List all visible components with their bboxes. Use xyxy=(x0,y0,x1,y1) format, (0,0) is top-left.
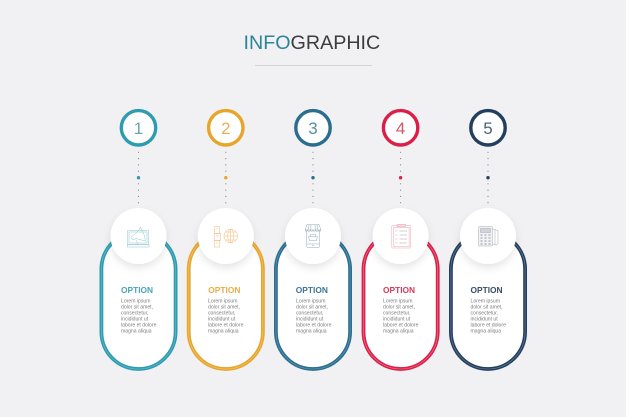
title: INFOGRAPHIC xyxy=(244,32,380,54)
body text 1: consectetur, xyxy=(121,311,148,317)
body text 1: Lorem ipsum xyxy=(121,299,150,305)
body text 5: consectetur, xyxy=(470,311,498,317)
icon: calculator terminal xyxy=(478,226,498,246)
body text 2: incididunt ut xyxy=(208,317,236,323)
number badge 2 xyxy=(209,111,243,145)
option heading 3: OPTION xyxy=(296,285,328,295)
connector 5 xyxy=(486,152,490,203)
body text 5: dolor sit amet, xyxy=(470,305,502,311)
number badge 3: 3 xyxy=(308,119,318,138)
number badge 5: 5 xyxy=(483,119,493,138)
number badge 5 xyxy=(471,111,505,145)
panel: option 3 xyxy=(276,111,350,369)
body text 1: incididunt ut xyxy=(121,317,149,323)
number badge 1: 1 xyxy=(134,119,143,138)
body text 5: Lorem ipsum xyxy=(470,299,500,305)
number badge 2: 2 xyxy=(221,119,231,138)
icon: globe and column xyxy=(214,226,238,247)
number badge 3 xyxy=(296,111,330,145)
icon circle 4 xyxy=(373,208,429,264)
panel: option 1 xyxy=(101,111,176,369)
icon: mobile shop xyxy=(305,224,321,248)
icon circle 2 xyxy=(198,208,254,264)
connector 3 xyxy=(311,152,315,203)
connector 2 xyxy=(224,152,228,203)
icon circle 3 xyxy=(285,208,341,264)
panel: option 5 xyxy=(451,111,525,369)
panel: option 2 xyxy=(189,111,263,369)
panel: option 4 xyxy=(364,111,438,369)
body text 1: magna aliqua xyxy=(121,329,152,335)
card 4 xyxy=(364,232,438,369)
card 5 xyxy=(451,232,525,369)
body text 4: dolor sit amet, xyxy=(383,305,415,311)
body text 4: incididunt ut xyxy=(383,317,411,323)
body text 4: Lorem ipsum xyxy=(383,299,412,305)
body text 2: magna aliqua xyxy=(208,329,239,335)
body text 5: incididunt ut xyxy=(470,317,498,323)
option heading 4: OPTION xyxy=(383,285,415,295)
body text 3: magna aliqua xyxy=(296,329,327,335)
body text 2: consectetur, xyxy=(208,311,235,317)
connector 4 xyxy=(399,152,402,203)
body text 5: labore et dolore xyxy=(470,323,506,329)
body text 3: labore et dolore xyxy=(296,323,332,329)
option heading 2: OPTION xyxy=(208,285,240,295)
body text 4: magna aliqua xyxy=(383,329,414,335)
body text 3: incididunt ut xyxy=(296,317,324,323)
body text 4: labore et dolore xyxy=(383,323,419,329)
body text 2: labore et dolore xyxy=(208,323,244,329)
body text 1: dolor sit amet, xyxy=(121,305,153,311)
number badge 4 xyxy=(383,111,418,145)
body text 3: Lorem ipsum xyxy=(296,299,325,305)
body text 3: dolor sit amet, xyxy=(296,305,328,311)
connector 1 xyxy=(137,152,140,203)
icon: checklist clipboard xyxy=(392,224,411,248)
option heading 5: OPTION xyxy=(470,285,503,295)
number badge 4: 4 xyxy=(396,119,405,138)
icon: laptop megaphone xyxy=(127,227,149,247)
card 1 xyxy=(101,232,176,369)
body text 3: consectetur, xyxy=(296,311,323,317)
body text 1: labore et dolore xyxy=(121,323,157,329)
icon circle 5 xyxy=(460,208,516,264)
body text 5: magna aliqua xyxy=(470,329,501,335)
option heading 1: OPTION xyxy=(121,285,153,295)
icon circle 1 xyxy=(110,208,166,264)
body text 2: Lorem ipsum xyxy=(208,299,237,305)
card 2 xyxy=(189,232,263,369)
card 3 xyxy=(276,232,350,369)
body text 2: dolor sit amet, xyxy=(208,305,240,311)
number badge 1 xyxy=(121,111,156,145)
body text 4: consectetur, xyxy=(383,311,410,317)
